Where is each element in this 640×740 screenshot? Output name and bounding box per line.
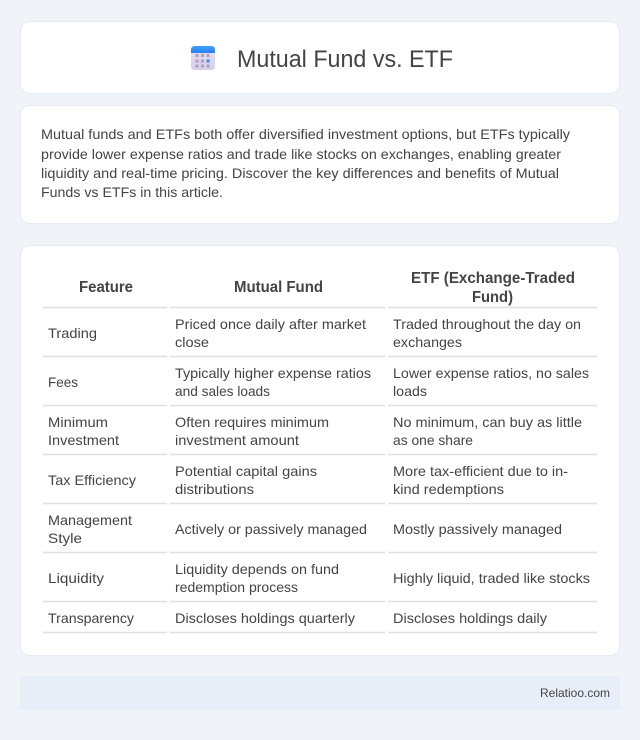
- row: Minimum Investment: investment amount: [175, 432, 299, 448]
- row: Trading: Priced once daily after market: [175, 316, 366, 332]
- row: Transparency: Discloses holdings quarterly: [175, 610, 355, 626]
- row: Liquidity: [48, 561, 590, 595]
- table header: Mutual Fund: [234, 279, 323, 296]
- row: Liquidity: redemption process: [175, 579, 298, 595]
- row: Management Style: [48, 512, 562, 546]
- row: Management Style: Mostly passively managed: [393, 521, 562, 537]
- row: Liquidity: Highly liquid, traded like stocks: [393, 570, 590, 586]
- row: Fees: Fees: [48, 374, 78, 390]
- row: Liquidity: Liquidity: [48, 570, 104, 586]
- row: Minimum Investment: No minimum, can buy as little: [393, 414, 582, 430]
- row: Fees: and sales loads: [175, 383, 270, 399]
- row: Minimum Investment: Often requires minimum: [175, 414, 329, 430]
- row: Management Style: Management: [48, 512, 132, 528]
- row: Trading: Traded throughout the day on: [393, 316, 581, 332]
- row: Tax Efficiency: Tax Efficiency: [48, 472, 136, 488]
- row: Management Style: Actively or passively managed: [175, 521, 367, 537]
- icon: calendar grid: [191, 46, 215, 70]
- row: Minimum Investment: [48, 414, 582, 448]
- table header: ETF (Exchange-Traded: [411, 270, 575, 287]
- comparison table panel: [20, 246, 620, 656]
- row: Fees: [48, 365, 589, 399]
- row: Trading: Trading: [48, 325, 97, 341]
- table header: [79, 270, 575, 306]
- row: Fees: Lower expense ratios, no sales: [393, 365, 589, 381]
- footer bar: [20, 676, 620, 710]
- row: Minimum Investment: Minimum: [48, 414, 108, 430]
- row: Liquidity: Liquidity depends on fund: [175, 561, 339, 577]
- footer credit: Relatioo.com: [540, 686, 610, 700]
- row: Tax Efficiency: kind redemptions: [393, 481, 504, 497]
- row: Trading: [48, 316, 581, 350]
- row: Minimum Investment: as one share: [393, 432, 473, 448]
- intro text: Mutual funds and ETFs both offer diversified investment options, but ETFs typically: [41, 126, 570, 142]
- intro text: liquidity and real-time pricing. Discover the key differences and benefits of Mutual: [41, 165, 559, 181]
- title: Mutual Fund vs. ETF: [237, 46, 453, 73]
- intro text: provide lower expense ratios and trade like stocks on exchanges, enabling greater: [41, 146, 561, 162]
- intro text: [41, 126, 570, 200]
- row: Minimum Investment: Investment: [48, 432, 119, 448]
- row: Transparency: [48, 610, 547, 626]
- row: Tax Efficiency: [48, 463, 568, 497]
- title panel: [20, 22, 620, 94]
- intro panel: [20, 106, 620, 224]
- row: Fees: Typically higher expense ratios: [175, 365, 371, 381]
- row: Transparency: Discloses holdings daily: [393, 610, 547, 626]
- row: Tax Efficiency: Potential capital gains: [175, 463, 317, 479]
- row: Transparency: Transparency: [48, 610, 134, 626]
- intro text: Funds vs ETFs in this article.: [41, 184, 223, 200]
- row: Tax Efficiency: distributions: [175, 481, 254, 497]
- row: Management Style: Style: [48, 530, 82, 546]
- row: Trading: exchanges: [393, 334, 462, 350]
- row: Trading: close: [175, 334, 209, 350]
- row: Tax Efficiency: More tax-efficient due to in-: [393, 463, 568, 479]
- table header: Fund): [472, 289, 513, 306]
- table header: Feature: [79, 279, 133, 296]
- row: Fees: loads: [393, 383, 427, 399]
